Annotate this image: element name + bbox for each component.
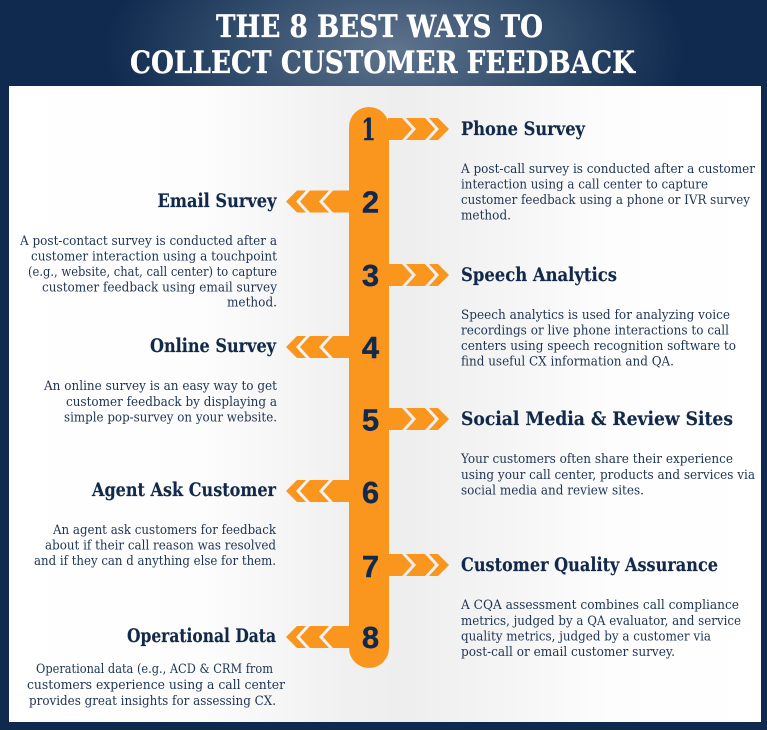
item 4: online survey (43, 335, 278, 426)
title (130, 9, 636, 81)
item 4: online survey: Online Survey (150, 335, 277, 357)
item 2: email survey: Email Survey (158, 190, 277, 212)
item 3: speech analytics: find useful CX information and QA. (461, 354, 674, 370)
item 8: operational data (27, 625, 286, 709)
item 6: agent ask customer: An agent ask customers for feedback (52, 523, 276, 538)
item 7: customer quality assurance (460, 554, 741, 660)
item 7: customer quality assurance: A CQA assessment combines call compliance (460, 598, 739, 613)
item 2: email survey: method. (227, 296, 277, 310)
item 5: social media and review sites: social media and review sites. (461, 484, 644, 498)
item 1: phone survey: Phone Survey (461, 118, 586, 140)
item 6: agent ask customer: Agent Ask Customer (91, 479, 277, 501)
item 1: phone survey: method. (461, 208, 511, 224)
arrow 1 (388, 118, 449, 140)
item 8: operational data: customers experience using a call center (27, 678, 286, 693)
item 7: customer quality assurance: post-call or email customer survey. (461, 645, 675, 660)
item 2: email survey: customer feedback using email survey (42, 280, 278, 296)
item 3: speech analytics: Speech analytics is used for analyzing voice (461, 308, 730, 323)
title: COLLECT CUSTOMER FEEDBACK (130, 45, 636, 81)
item 6: agent ask customer: about if their call reason was resolved (45, 538, 276, 554)
item 6: agent ask customer (34, 479, 277, 569)
arrow 2 (286, 190, 350, 212)
item 3: speech analytics (461, 264, 736, 370)
arrow 6 (286, 480, 350, 502)
item 7: customer quality assurance: quality metrics, judged by a customer via (461, 630, 711, 644)
item 3: speech analytics: Speech Analytics (461, 264, 617, 286)
item 5: social media and review sites (460, 408, 755, 498)
step numbers: 4 (362, 330, 380, 365)
item 8: operational data: Operational Data (127, 625, 276, 647)
step numbers: 7 (362, 549, 379, 584)
item 4: online survey: simple pop-survey on your website. (64, 410, 277, 426)
item 7: customer quality assurance: Customer Quality Assurance (461, 554, 718, 576)
step numbers: 2 (362, 184, 379, 220)
item 3: speech analytics: recordings or live phone interactions to call (461, 324, 729, 338)
item 2: email survey (19, 190, 278, 310)
item 4: online survey: customer feedback by displaying a (66, 395, 277, 410)
item 5: social media and review sites: Your customers often share their experience (460, 452, 733, 467)
item 4: online survey: An online survey is an easy way to get (43, 379, 278, 394)
arrow 4 (286, 336, 350, 358)
item 1: phone survey: interaction using a call center to capture (461, 178, 708, 192)
item 2: email survey: customer interaction using a touchpoint (31, 250, 278, 264)
step numbers: 1 (362, 113, 376, 148)
title: THE 8 BEST WAYS TO (216, 9, 543, 45)
item 2: email survey: A post-contact survey is conducted after a (19, 234, 277, 249)
item 6: agent ask customer: and if they can d anything else for them. (34, 554, 276, 569)
arrow 5 (388, 408, 449, 430)
step numbers: 3 (362, 258, 379, 293)
step numbers (362, 113, 380, 655)
header glow (9, 0, 761, 86)
item 8: operational data: provides great insights for assessing CX. (29, 694, 276, 709)
item 7: customer quality assurance: metrics, judged by a QA evaluator, and service (461, 614, 741, 629)
arrow 7 (388, 554, 449, 576)
item 5: social media and review sites: Social Media & Review Sites (461, 408, 733, 430)
step numbers: 5 (362, 402, 379, 438)
item 3: speech analytics: centers using speech recognition software to (461, 339, 736, 354)
step numbers: 6 (362, 475, 379, 510)
step numbers: 8 (362, 620, 379, 655)
arrow 3 (388, 264, 449, 286)
timeline bar (349, 107, 389, 668)
arrow 8 (286, 626, 350, 648)
item 1: phone survey (460, 118, 756, 224)
item 8: operational data: Operational data (e.g., ACD & CRM from (36, 662, 273, 677)
item 2: email survey: (e.g., website, chat, call center) to capture (28, 265, 277, 280)
